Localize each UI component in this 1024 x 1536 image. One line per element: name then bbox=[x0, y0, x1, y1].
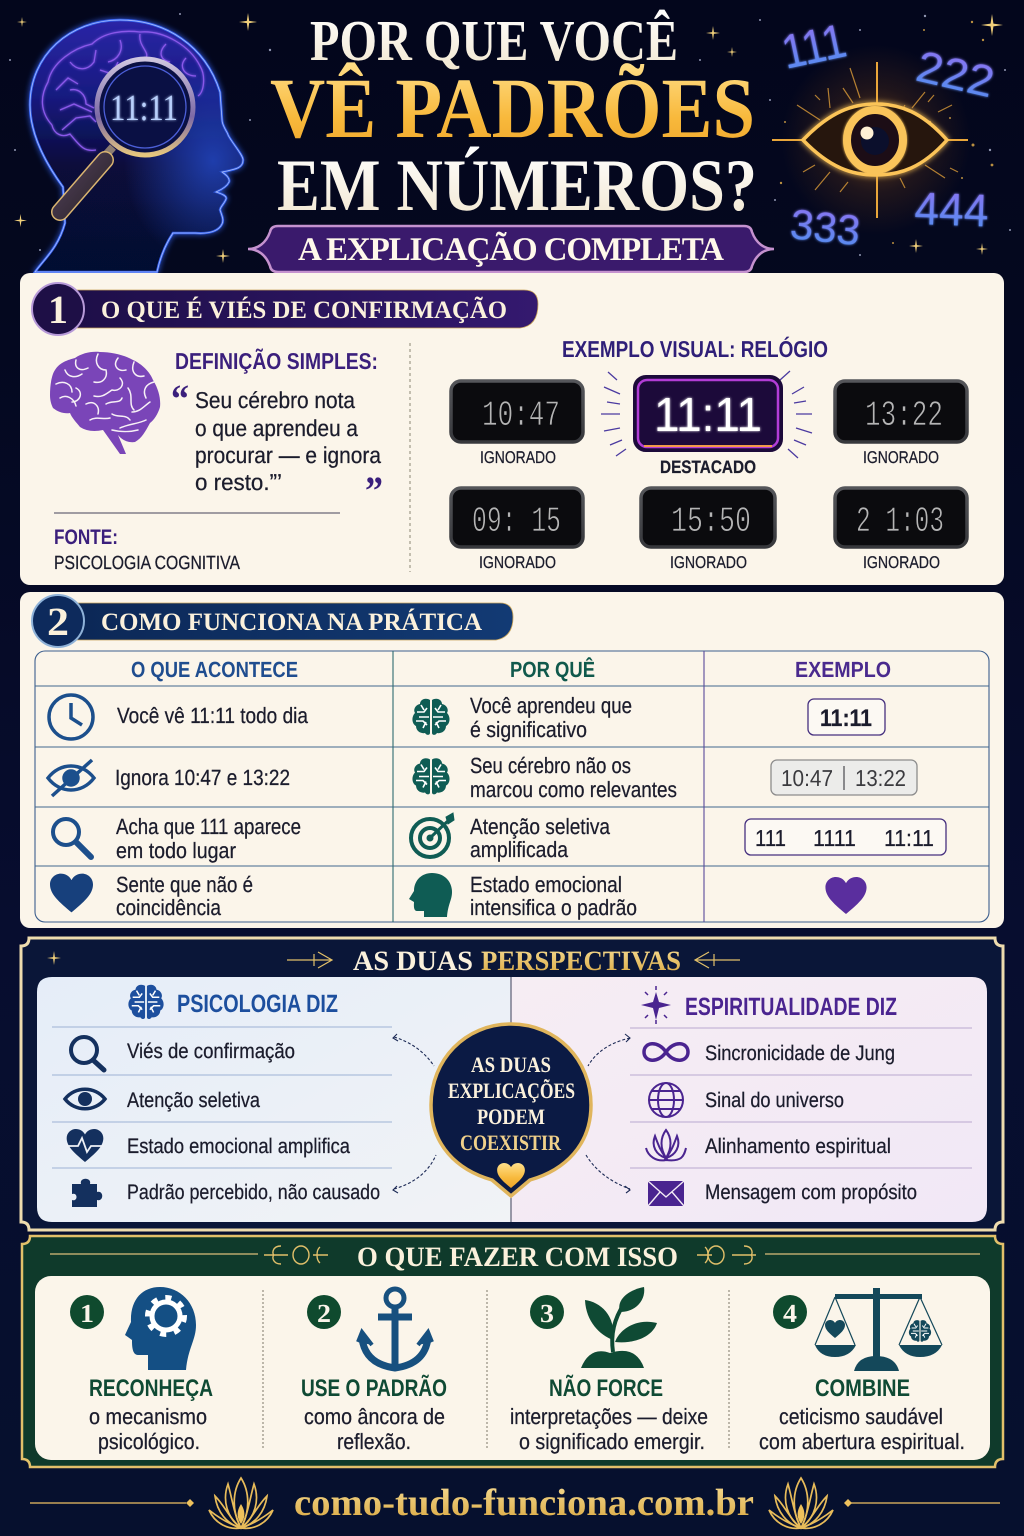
row 3: em todo lugar bbox=[116, 838, 236, 863]
clock 13:22 bbox=[835, 381, 967, 467]
clock 11:11 highlighted: DESTACADO bbox=[660, 457, 756, 477]
floating numbers: 333 bbox=[788, 200, 863, 254]
heading: O QUE FAZER COM ISSO bbox=[357, 1242, 678, 1273]
clock example heading: EXEMPLO VISUAL: RELÓGIO bbox=[562, 336, 828, 362]
floating numbers: 222 bbox=[912, 42, 999, 107]
clock 11:11 highlighted: 11:11 bbox=[654, 389, 762, 442]
floating numbers: 444 bbox=[914, 182, 989, 237]
item: estado emocional: Estado emocional amplifica bbox=[127, 1135, 350, 1158]
row 3: Acha que 111 aparece bbox=[116, 814, 301, 839]
icon: right lotus bbox=[769, 1478, 833, 1528]
icon: sprout bbox=[581, 1287, 657, 1368]
panel: espiritualidade diz: ESPIRITUALIDADE DIZ bbox=[685, 993, 897, 1021]
row 3: 1111 bbox=[813, 825, 856, 851]
lens time: 11:11 bbox=[110, 88, 178, 129]
section heading 2 bbox=[32, 595, 513, 647]
magnifier lens bbox=[97, 59, 193, 155]
icon: heart in scale bbox=[825, 1320, 845, 1338]
row 3 bbox=[53, 813, 946, 863]
item: atenção seletiva: Atenção seletiva bbox=[127, 1089, 260, 1112]
icon: gold heart bbox=[497, 1163, 525, 1188]
row 3: amplificada bbox=[470, 837, 569, 862]
item: padrão percebido bbox=[72, 1179, 380, 1207]
step 2: como âncora de bbox=[304, 1404, 445, 1429]
step 1: o mecanismo bbox=[89, 1404, 207, 1429]
eye glow bbox=[781, 45, 971, 235]
row 3: 11:11 bbox=[884, 825, 934, 851]
panel: psicologia diz bbox=[37, 977, 511, 1222]
table column headings: O QUE ACONTECE bbox=[131, 657, 298, 682]
table grid bbox=[35, 651, 989, 922]
table column headings bbox=[131, 657, 891, 682]
center badge: COEXISTIR bbox=[460, 1130, 562, 1155]
item: estado emocional bbox=[66, 1129, 350, 1162]
clock 10:47: IGNORADO bbox=[480, 448, 556, 467]
icon: star bbox=[641, 986, 671, 1024]
heading bbox=[50, 1242, 980, 1273]
dashed arrows to center badge bbox=[393, 1034, 630, 1193]
table column headings: EXEMPLO bbox=[795, 657, 891, 682]
step 4 bbox=[759, 1288, 965, 1454]
icon: head with gear bbox=[125, 1287, 196, 1370]
step 2 bbox=[301, 1289, 447, 1454]
step 2: 2 bbox=[317, 1299, 331, 1328]
eye shape bbox=[803, 104, 947, 175]
source: PSICOLOGIA COGNITIVA bbox=[54, 553, 240, 574]
row 2: marcou como relevantes bbox=[470, 777, 677, 802]
brain outline lines bbox=[42, 31, 204, 150]
table column headings: POR QUÊ bbox=[510, 657, 595, 682]
definition text: o resto.”’ bbox=[195, 469, 282, 495]
panel: as duas perspectivas bbox=[21, 938, 1003, 1230]
header illustration: head with brain and magnifier bbox=[30, 20, 243, 272]
footer bbox=[30, 1478, 1000, 1528]
step 3: NÃO FORCE bbox=[549, 1374, 663, 1402]
quote marks: “ bbox=[171, 376, 189, 421]
title: POR QUE VOCÊ bbox=[310, 8, 678, 73]
number badge bbox=[70, 1295, 104, 1329]
icon: brain bbox=[412, 758, 450, 794]
icon: brain in scale bbox=[909, 1320, 931, 1342]
clock 11:11 highlighted bbox=[601, 371, 812, 477]
row 2 bbox=[48, 753, 917, 802]
clock 09:15 bbox=[451, 488, 583, 572]
section heading 2: COMO FUNCIONA NA PRÁTICA bbox=[101, 608, 482, 636]
subtitle ribbon bbox=[248, 226, 774, 272]
row 2: 13:22 bbox=[855, 765, 906, 791]
item: mensagem com propósito bbox=[648, 1181, 917, 1206]
definition text: Seu cérebro nota bbox=[195, 387, 355, 413]
row 3: Atenção seletiva bbox=[470, 814, 611, 839]
step 1: 1 bbox=[80, 1299, 94, 1328]
section heading 2: 2 bbox=[47, 599, 69, 644]
definition text: procurar — e ignora bbox=[195, 442, 381, 468]
clock 15:50 bbox=[641, 488, 775, 572]
section heading 1: O QUE É VIÉS DE CONFIRMAÇÃO bbox=[101, 296, 507, 324]
title: VÊ PADRÕES bbox=[270, 60, 755, 156]
center badge: EXPLICAÇÕES bbox=[448, 1078, 575, 1103]
icon: head silhouette bbox=[409, 873, 452, 917]
head silhouette bbox=[30, 20, 243, 272]
item: sinal do universo bbox=[649, 1083, 844, 1117]
panel: psicologia diz: PSICOLOGIA DIZ bbox=[177, 990, 338, 1018]
heading: AS DUAS bbox=[353, 946, 473, 977]
step 4: 4 bbox=[783, 1299, 797, 1328]
clock 13:22: IGNORADO bbox=[863, 448, 939, 467]
panel: como funciona na prática bbox=[20, 592, 1004, 928]
item: sinal do universo: Sinal do universo bbox=[705, 1089, 844, 1112]
step 1: RECONHEÇA bbox=[89, 1375, 213, 1402]
row 4: intensifica o padrão bbox=[470, 895, 637, 920]
source: FONTE: bbox=[54, 526, 118, 549]
step 3: o significado emergir. bbox=[519, 1429, 705, 1454]
clock 10:47: 10:47 bbox=[482, 395, 560, 436]
clock 09:15: IGNORADO bbox=[479, 553, 556, 572]
item: sincronicidade: Sincronicidade de Jung bbox=[705, 1042, 895, 1065]
icon: purple heart bbox=[825, 877, 867, 914]
subtitle ribbon: A EXPLICAÇÃO COMPLETA bbox=[298, 231, 724, 268]
step 3: interpretações — deixe bbox=[510, 1404, 708, 1429]
row 4 bbox=[50, 872, 867, 920]
step 2: reflexão. bbox=[337, 1429, 411, 1454]
icon: glowing eye with numbers bbox=[772, 15, 999, 254]
step 1 bbox=[70, 1287, 213, 1454]
panel: espiritualidade diz bbox=[511, 977, 987, 1222]
icon: brain bbox=[412, 699, 450, 735]
title bbox=[270, 8, 757, 227]
icon: clock bbox=[49, 695, 93, 739]
item: viés de confirmação bbox=[71, 1037, 295, 1070]
item: padrão percebido: Padrão percebido, não causado bbox=[127, 1181, 380, 1204]
row 4: Sente que não é bbox=[116, 872, 253, 897]
center badge: AS DUAS bbox=[471, 1052, 551, 1077]
panel: o que é viés de confirmação bbox=[20, 273, 1004, 585]
icon: purple brain bbox=[50, 352, 160, 454]
row 2: Seu cérebro não os bbox=[470, 753, 631, 778]
iris bbox=[847, 110, 903, 170]
row 2: 10:47 bbox=[781, 765, 833, 791]
row 4: coincidência bbox=[116, 895, 222, 920]
row 1: 11:11 bbox=[820, 705, 872, 732]
clock 21:03 bbox=[835, 488, 967, 572]
item: alinhamento espiritual: Alinhamento espiritual bbox=[705, 1135, 891, 1158]
row 1: Você aprendeu que bbox=[470, 693, 632, 718]
row 1 bbox=[49, 693, 885, 742]
clock 09:15: 09: 15 bbox=[472, 501, 561, 542]
step 4: ceticismo saudável bbox=[779, 1404, 943, 1429]
clock 21:03: 2 1:03 bbox=[856, 501, 944, 542]
closing quote: ” bbox=[365, 468, 383, 513]
row 4: Estado emocional bbox=[470, 872, 622, 897]
definition heading: DEFINIÇÃO SIMPLES: bbox=[175, 348, 378, 374]
step 3 bbox=[510, 1287, 708, 1454]
step 4: COMBINE bbox=[815, 1375, 910, 1402]
clock 15:50: IGNORADO bbox=[670, 553, 747, 572]
starfield bbox=[9, 13, 1011, 263]
heading bbox=[47, 946, 740, 977]
step 3: 3 bbox=[540, 1299, 554, 1328]
icon: crossed eye bbox=[48, 760, 94, 796]
row 1: é significativo bbox=[470, 717, 587, 742]
step 4: com abertura espiritual. bbox=[759, 1429, 965, 1454]
definition text bbox=[195, 387, 381, 495]
section heading 1: 1 bbox=[48, 287, 68, 332]
floating numbers bbox=[777, 15, 999, 254]
icon: balance scale bbox=[815, 1288, 942, 1371]
icon: magnifier bbox=[53, 819, 91, 857]
face glow bbox=[30, 20, 243, 272]
icon: anchor bbox=[358, 1289, 432, 1368]
step 2: USE O PADRÃO bbox=[301, 1374, 447, 1402]
item: mensagem com propósito: Mensagem com propósito bbox=[705, 1181, 917, 1204]
center badge bbox=[431, 1024, 591, 1196]
clock 21:03: IGNORADO bbox=[863, 553, 940, 572]
item: sincronicidade bbox=[644, 1042, 895, 1065]
source bbox=[54, 526, 240, 574]
row 1: Você vê 11:11 todo dia bbox=[117, 703, 309, 728]
definition text: o que aprendeu a bbox=[195, 415, 358, 441]
title: EM NÚMEROS? bbox=[277, 145, 757, 227]
center badge: PODEM bbox=[477, 1104, 545, 1129]
panel: o que fazer com isso bbox=[22, 1236, 1003, 1467]
magnifier handle bbox=[60, 147, 113, 212]
item: atenção seletiva bbox=[65, 1089, 260, 1112]
icon: left lotus bbox=[209, 1478, 273, 1528]
row 3: 111 bbox=[755, 825, 786, 851]
section heading 1 bbox=[32, 283, 538, 335]
row 2: Ignora 10:47 e 13:22 bbox=[115, 765, 290, 790]
icon: blue heart bbox=[50, 874, 93, 912]
icon: blue brain bbox=[128, 985, 164, 1019]
icon: target bbox=[411, 813, 454, 857]
item: viés de confirmação: Viés de confirmação bbox=[127, 1040, 295, 1063]
website: como-tudo-funciona.com.br bbox=[294, 1482, 754, 1524]
clock 13:22: 13:22 bbox=[865, 395, 943, 436]
eye rays bbox=[772, 62, 968, 218]
item: alinhamento espiritual bbox=[646, 1130, 891, 1160]
clock 15:50: 15:50 bbox=[671, 501, 751, 542]
floating numbers: 111 bbox=[777, 15, 851, 80]
clock 10:47 bbox=[451, 381, 583, 467]
heading: PERSPECTIVAS bbox=[481, 946, 681, 977]
step 1: psicológico. bbox=[98, 1429, 200, 1454]
